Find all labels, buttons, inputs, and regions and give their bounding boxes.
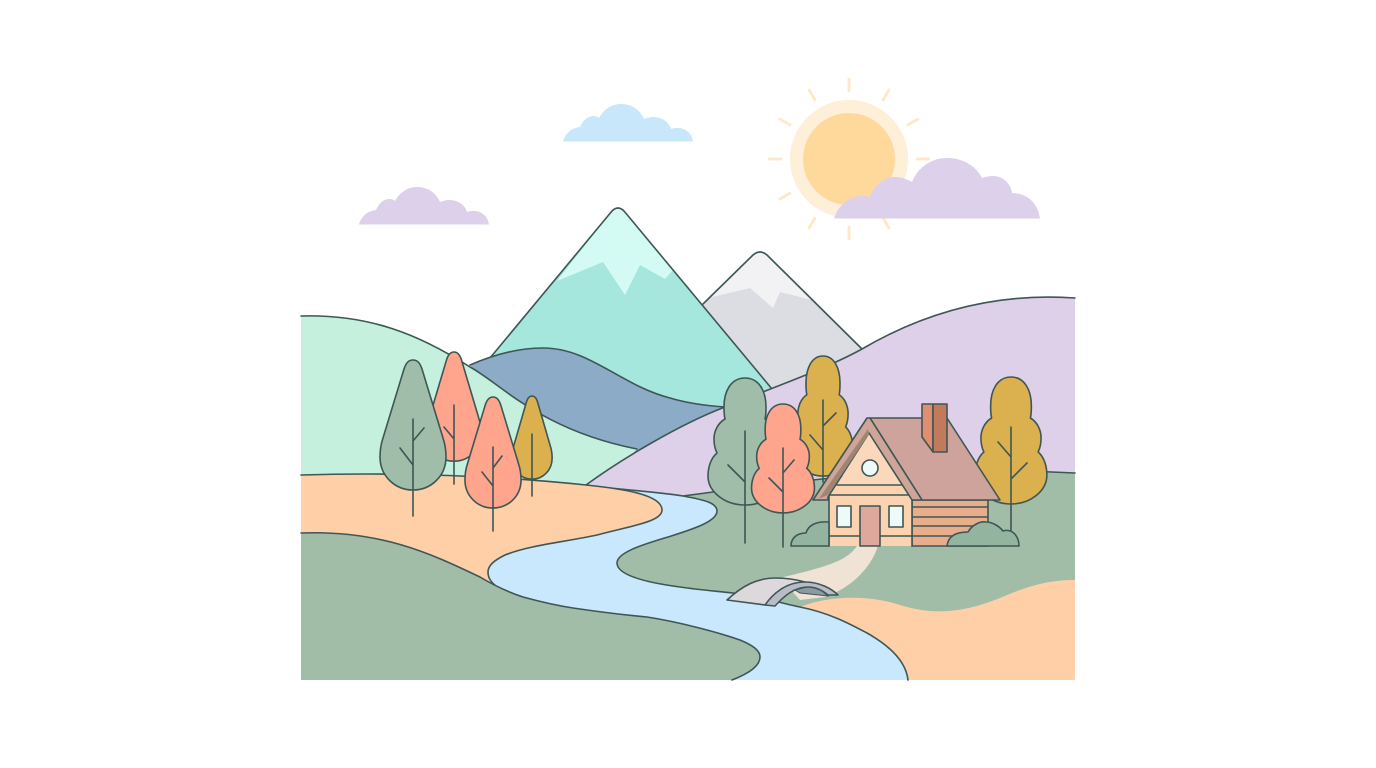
mint hill — [301, 316, 637, 490]
bridge deck — [727, 578, 805, 605]
cloud: small blue — [563, 104, 693, 142]
tree: sage left — [380, 360, 446, 516]
tree: coral round — [752, 404, 814, 547]
tree: gold right — [975, 377, 1047, 532]
tree: gold behind house — [793, 356, 853, 482]
teal mountain — [480, 208, 772, 420]
main roof — [870, 418, 1000, 500]
bush right — [947, 522, 1019, 546]
blue hill — [470, 348, 725, 460]
sun — [768, 78, 930, 240]
bridge arch — [765, 582, 838, 606]
tree: coral front — [465, 397, 521, 531]
cloud: large lilac — [834, 158, 1040, 218]
side wall with log siding — [912, 500, 988, 546]
garden path — [780, 546, 878, 600]
green meadow — [600, 470, 1075, 680]
cloud: small lilac — [359, 187, 489, 224]
bush left — [791, 522, 829, 546]
sand bank right — [800, 580, 1075, 680]
round attic window — [862, 460, 878, 476]
right window — [889, 506, 903, 527]
chimney — [922, 404, 947, 452]
bridge — [727, 578, 838, 606]
grey mountain — [690, 252, 870, 400]
tree: coral back — [427, 352, 481, 484]
gable trim — [813, 418, 922, 500]
house — [813, 404, 1000, 546]
sand bank left — [301, 474, 662, 600]
tree: sage round — [708, 378, 782, 543]
door — [860, 506, 880, 546]
bridge shadow — [795, 585, 828, 596]
front gable wall — [829, 433, 912, 546]
river — [480, 488, 908, 680]
green foreground hill — [301, 533, 760, 680]
tree: gold small — [512, 396, 552, 496]
lilac hill — [586, 297, 1075, 505]
left window — [837, 506, 851, 527]
